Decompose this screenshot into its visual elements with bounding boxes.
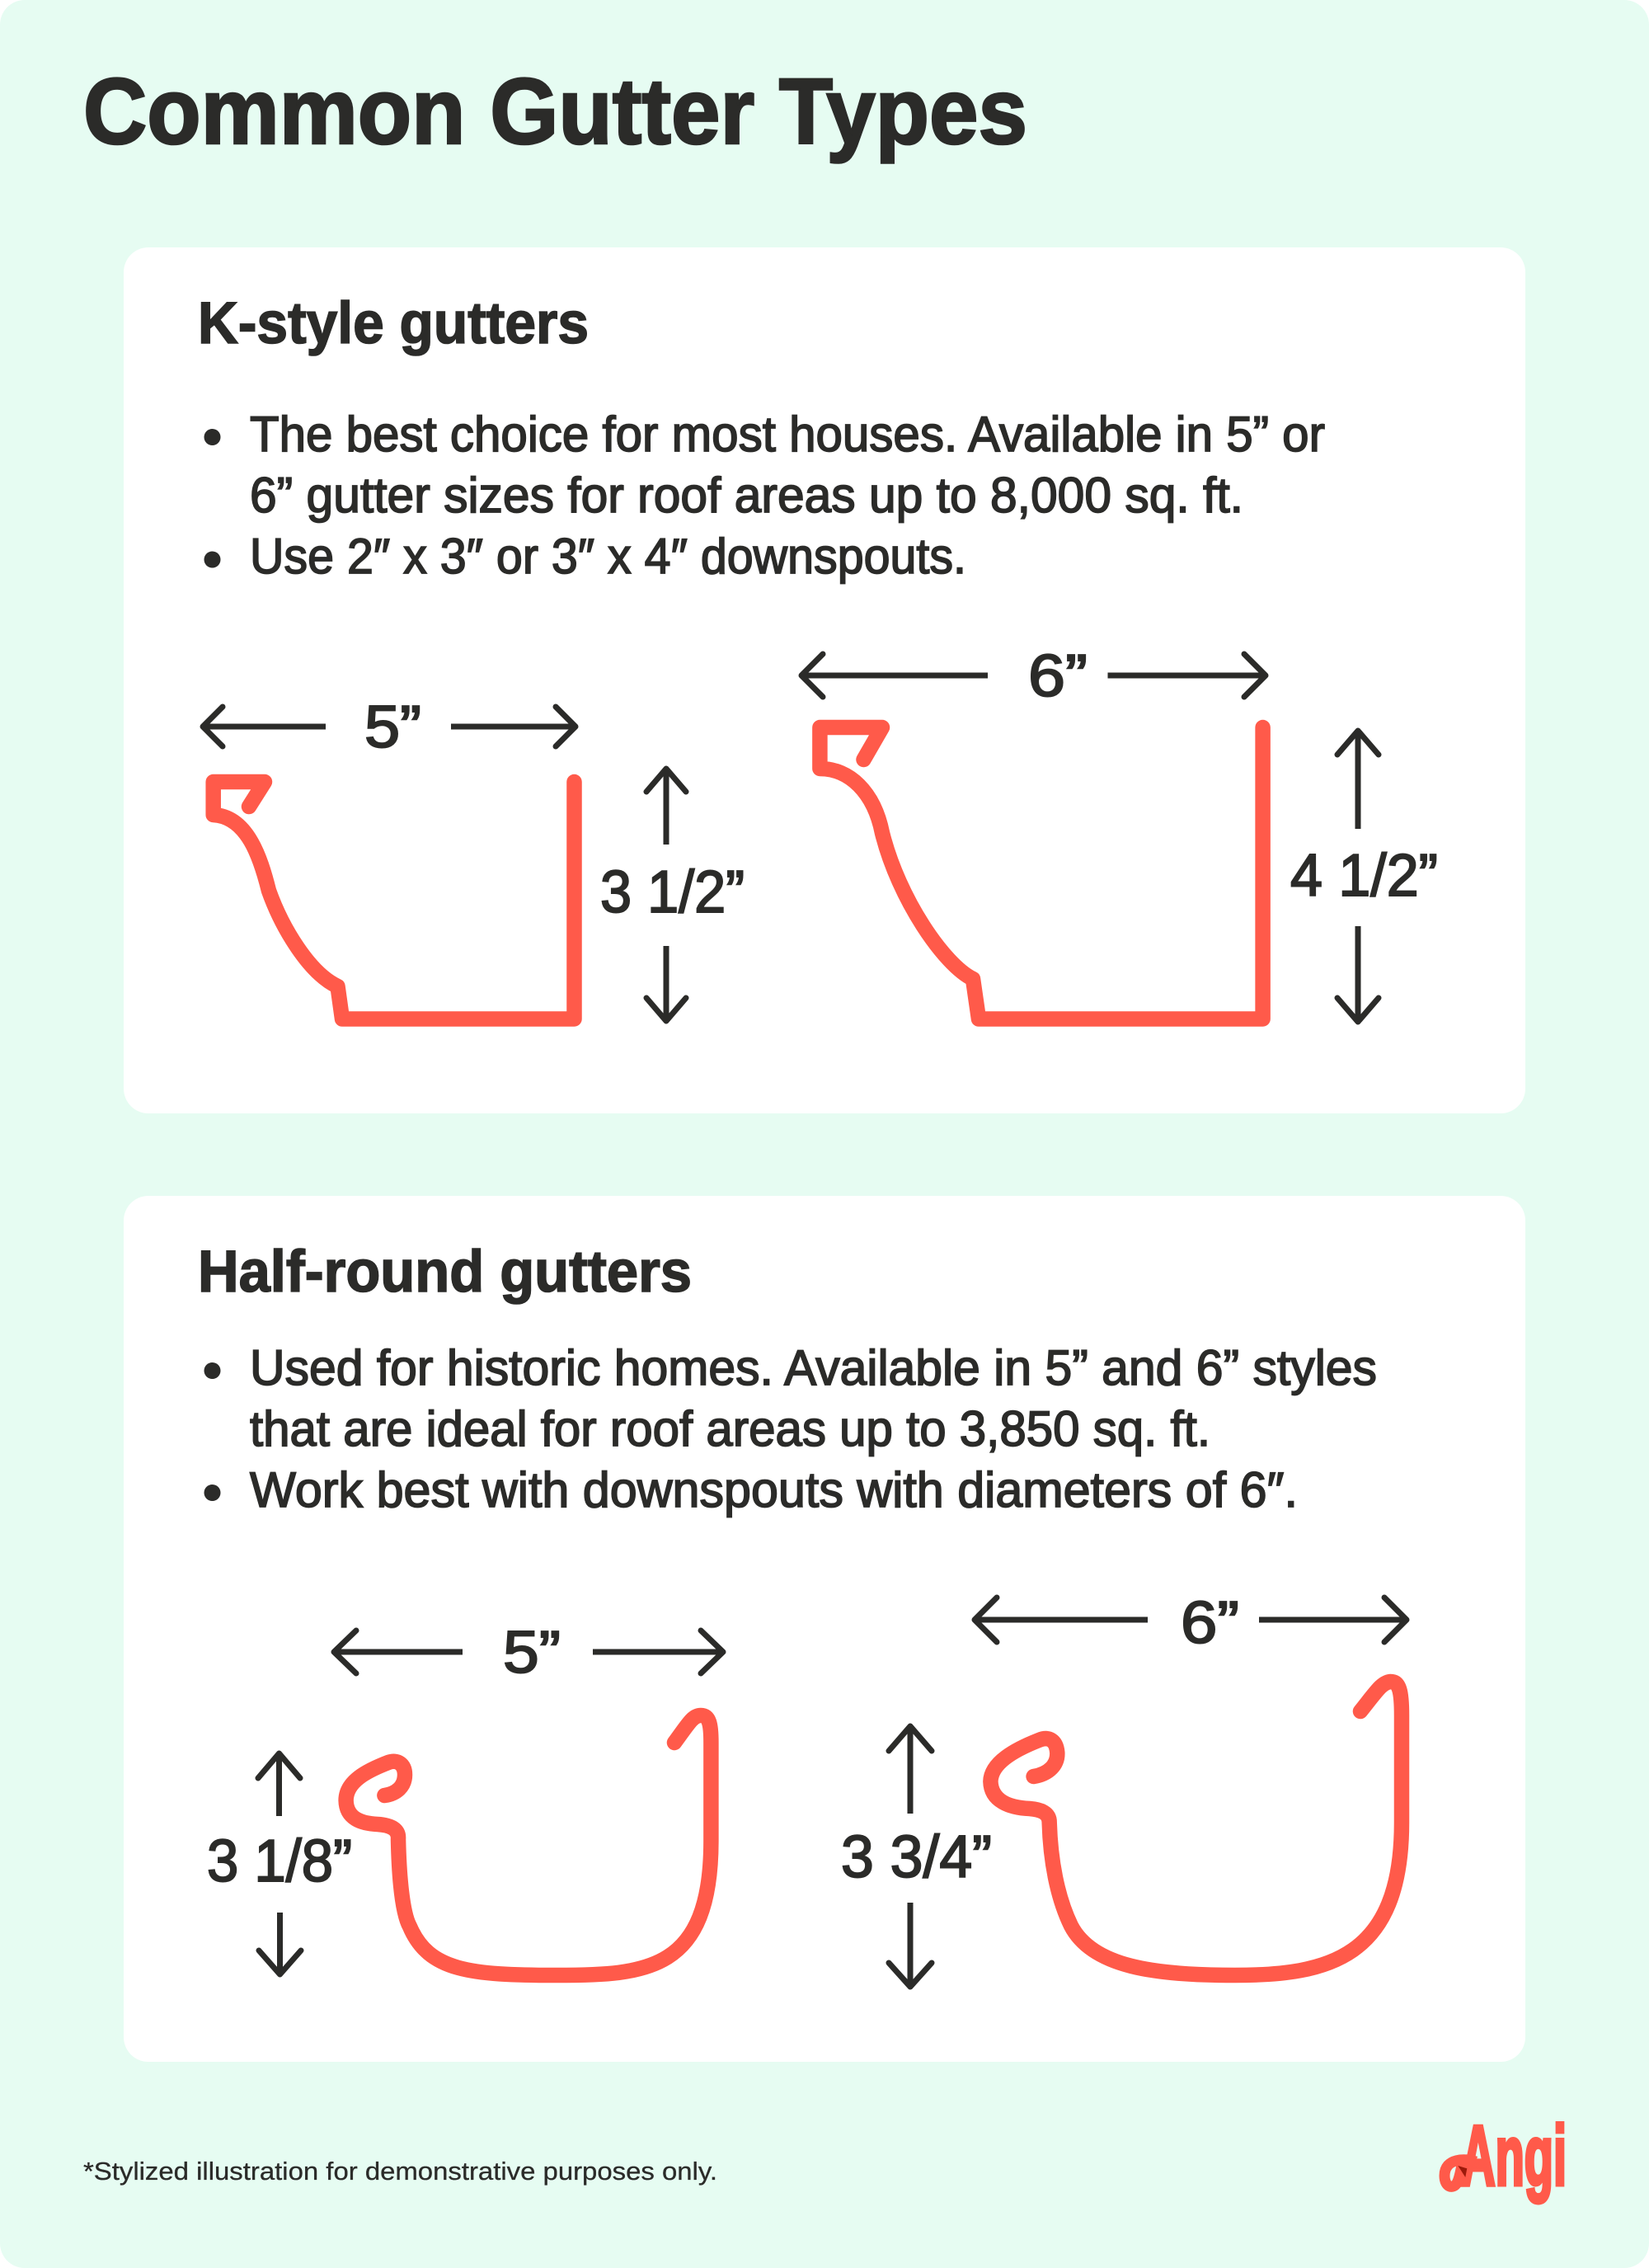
text block: Half-round bullets: Work best with downspouts with diameters of 6″. <box>250 1462 1298 1517</box>
arrow: 5 inch width <box>334 1620 723 1686</box>
arrow: 4 1/2 inch height <box>1290 731 1438 1022</box>
heading: K-style gutters: K-style gutters <box>198 291 589 356</box>
arrow: 3 1/8 inch height <box>207 1753 352 1974</box>
title: Common Gutter Types <box>83 59 1027 163</box>
arrow: 3 1/2 inch height: 3 1/2” <box>600 859 745 925</box>
arrow: 5 inch width: 5” <box>503 1620 561 1686</box>
arrow: 6 inch width: 6” <box>1028 643 1088 709</box>
text block: K-style bullets: Use 2″ x 3″ or 3″ x 4″ downspouts. <box>250 529 966 584</box>
arrow: 6 inch width <box>975 1590 1407 1656</box>
diagram: Half-round 5 inch gutter profile <box>346 1715 711 1975</box>
diagram: Half-round 6 inch gutter profile <box>990 1682 1402 1975</box>
arrow: 5 inch width <box>203 694 576 760</box>
panel: Half-round gutters <box>124 1196 1525 2062</box>
text block: K-style bullets: The best choice for most houses. Available in 5” or <box>250 407 1325 462</box>
text block: Half-round bullets: Used for historic homes. Available in 5” and 6” styles <box>250 1340 1377 1395</box>
arrow: 6 inch width <box>801 643 1266 709</box>
text block: Half-round bullets <box>204 1340 1377 1517</box>
arrow: 5 inch width: 5” <box>364 694 421 760</box>
arrow: 3 3/4 inch height: 3 3/4” <box>841 1824 992 1890</box>
arrow: 4 1/2 inch height: 4 1/2” <box>1290 843 1438 909</box>
diagram: K-style 5 inch gutter profile <box>214 782 574 1019</box>
arrow: 6 inch width: 6” <box>1181 1590 1239 1656</box>
footnote: *Stylized illustration for demonstrative purposes only. <box>83 2157 717 2186</box>
text block: K-style bullets: 6” gutter sizes for roof areas up to 8,000 sq. ft. <box>250 468 1243 523</box>
diagram: K-style 6 inch gutter profile <box>820 727 1263 1019</box>
arrow: 3 1/2 inch height <box>600 769 745 1021</box>
text block: K-style bullets <box>204 407 1325 584</box>
logo: Angi: Angi <box>1461 2108 1567 2203</box>
panel: K-style gutters <box>124 247 1525 1113</box>
arrow: 3 1/8 inch height: 3 1/8” <box>207 1828 352 1894</box>
heading: Half-round gutters: Half-round gutters <box>198 1240 692 1305</box>
arrow: 3 3/4 inch height <box>841 1726 992 1987</box>
logo: Angi <box>1445 2108 1567 2203</box>
text block: Half-round bullets: that are ideal for roof areas up to 3,850 sq. ft. <box>250 1401 1210 1456</box>
